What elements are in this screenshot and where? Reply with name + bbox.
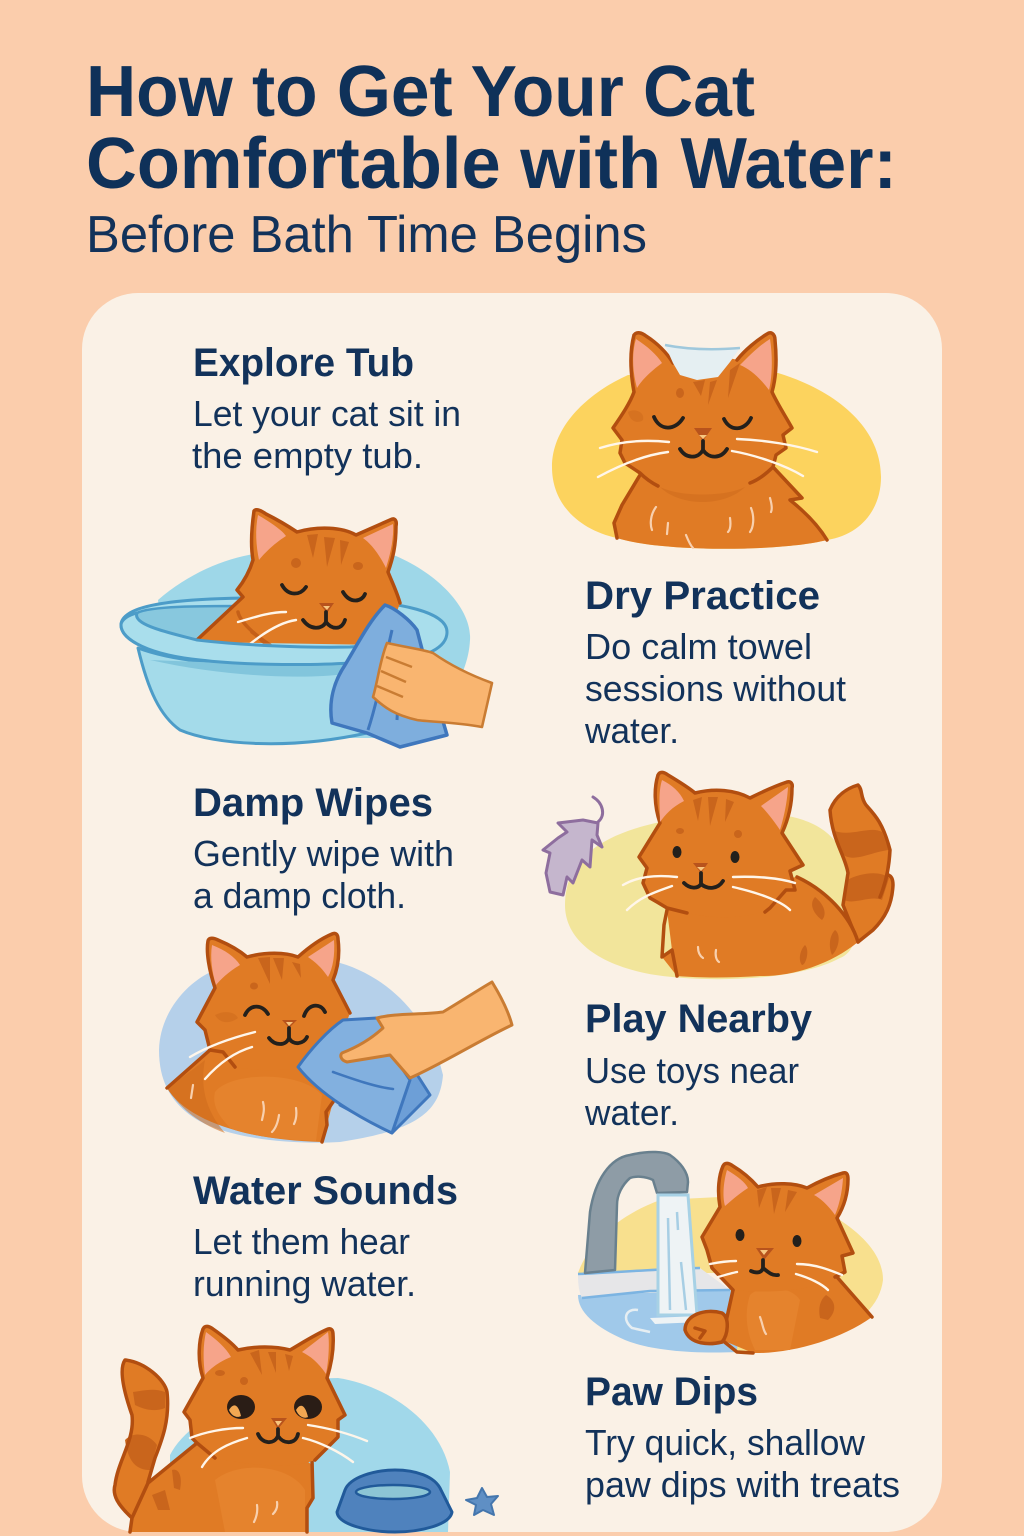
text block: Play Nearby [584,997,813,1133]
title [86,52,897,264]
title: Comfortable with Water: [86,124,897,204]
text block: Explore Tub: Let your cat sit in [193,393,461,434]
text block: Paw Dips [585,1370,900,1505]
title: Before Bath Time Begins [86,206,647,264]
panel: tips card [82,293,942,1532]
text block: Explore Tub [192,341,461,476]
text block: Water Sounds: Let them hear [193,1221,410,1262]
icon: water bowl [337,1470,452,1532]
text block: Damp Wipes: Damp Wipes [193,781,433,825]
text block: Play Nearby: Use toys near [585,1050,799,1091]
text block: Paw Dips: Try quick, shallow [585,1422,866,1463]
illustration: cat with water bowl and star [114,1326,498,1532]
text block: Play Nearby: water. [584,1092,679,1133]
illustration: cat in tub with towel [121,510,492,747]
text block: Dry Practice [584,574,846,751]
title: How to Get Your Cat [86,52,755,132]
text block: Water Sounds: running water. [193,1263,416,1304]
text block: Play Nearby: Play Nearby [585,997,813,1041]
icon: star [466,1488,498,1515]
text block: Damp Wipes: Gently wipe with [193,833,454,874]
text block: Dry Practice: Dry Practice [585,574,820,618]
text block: Explore Tub: Explore Tub [193,341,414,385]
text block: Dry Practice: Do calm towel [585,626,812,667]
illustration: cat playing with feather [543,772,893,979]
text block: Explore Tub: the empty tub. [192,435,423,476]
illustration: cat wiped with damp cloth [159,933,512,1143]
illustration: cat by running faucet [578,1152,883,1353]
text block: Paw Dips: paw dips with treats [585,1464,900,1505]
text block: Paw Dips: Paw Dips [585,1370,758,1414]
text block: Water Sounds: Water Sounds [193,1169,458,1213]
text block: Dry Practice: sessions without [585,668,846,709]
icon: feather toy [543,797,603,895]
text block: Damp Wipes [193,781,454,916]
text block: Dry Practice: water. [584,710,679,751]
text block: Water Sounds [193,1169,458,1304]
illustration: calm cat with towel on head [552,333,881,549]
text block: Damp Wipes: a damp cloth. [193,875,406,916]
